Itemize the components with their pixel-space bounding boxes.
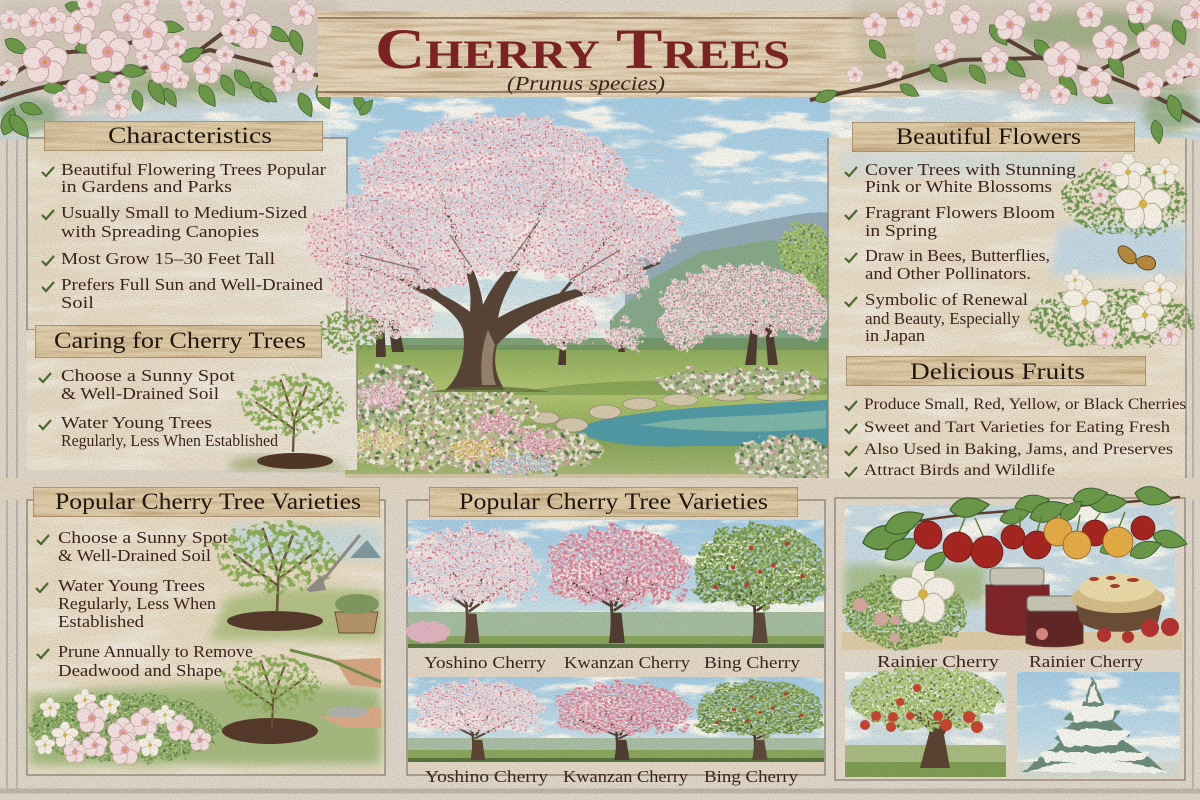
subtitle: (Prunus species) (507, 73, 665, 95)
labels: varieties row 1 (424, 653, 801, 672)
foliage bush (843, 561, 985, 648)
sky (330, 92, 830, 362)
text: caring list: Water Young Trees (61, 413, 212, 432)
scene row 2 (408, 677, 825, 762)
text: flowers list: in Japan (865, 326, 926, 345)
icon: butterfly (1118, 246, 1156, 270)
panel: characteristics background (27, 138, 347, 330)
scene row 1 (404, 520, 827, 648)
heading: varieties left: Popular Cherry Tree Varieties (55, 489, 361, 514)
snowy tree picture (1017, 672, 1180, 777)
heading: caring (35, 325, 322, 358)
right panel flowers (1028, 153, 1192, 348)
heading: varieties middle (429, 487, 798, 517)
text: flowers list: Symbolic of Renewal (865, 290, 1028, 309)
text: fruits list: Produce Small, Red, Yellow, or Black Cherries (864, 396, 1186, 413)
heading: characteristics (44, 121, 323, 151)
text: flowers list (845, 160, 1077, 345)
pie (1071, 574, 1165, 632)
text: flowers list: and Beauty, Especially (865, 309, 1020, 328)
text: planting list: & Well-Drained Soil (58, 546, 211, 565)
text: characteristics list: with Spreading Canopies (61, 222, 259, 241)
text: characteristics list: in Gardens and Parks (61, 177, 232, 196)
big cherry tree (305, 116, 680, 392)
heading: characteristics: Characteristics (108, 123, 272, 148)
pond stones (531, 393, 805, 432)
shelf (842, 632, 1182, 650)
text: caring list: & Well-Drained Soil (61, 384, 219, 403)
text: fruits list (845, 396, 1186, 479)
top right blossom branch (810, 0, 1200, 145)
text: planting list: Water Young Trees (58, 576, 205, 595)
heading: delicious fruits (846, 356, 1146, 386)
labels: rainier cherries: Rainier Cherry (877, 652, 1000, 671)
text: planting list (36, 528, 253, 680)
small cherries on shelf (1097, 618, 1179, 643)
heading: beautiful flowers: Beautiful Flowers (896, 124, 1081, 149)
labels: varieties row 1: Kwanzan Cherry (564, 653, 691, 672)
labels: varieties row 2 (425, 767, 799, 786)
text: flowers list: Cover Trees with Stunning (865, 160, 1077, 179)
title: Cherry Trees (375, 18, 790, 81)
text: fruits list: Also Used in Baking, Jams, and Preserves (864, 441, 1173, 458)
text: characteristics list (42, 160, 326, 312)
text: planting list: Established (58, 612, 145, 631)
garden scene (29, 650, 381, 765)
heading: delicious fruits: Delicious Fruits (910, 359, 1085, 384)
landscape scene (330, 92, 837, 481)
planting scene (210, 522, 381, 640)
foliage near caring banner (322, 310, 382, 354)
text: characteristics list: Prefers Full Sun and Well-Drained (61, 275, 324, 294)
labels: varieties row 2: Kwanzan Cherry (563, 767, 689, 786)
text: caring list: Regularly, Less When Established (61, 431, 279, 450)
cherry branch (860, 484, 1189, 575)
text: characteristics list: Beautiful Flowering Trees Popular (61, 160, 326, 179)
labels: varieties row 2: Yoshino Cherry (425, 767, 549, 786)
text: planting list: Regularly, Less When (58, 594, 216, 613)
text: fruits list: Sweet and Tart Varieties for Eating Fresh (864, 419, 1170, 436)
heading: varieties middle: Popular Cherry Tree Varieties (459, 489, 768, 514)
text: planting list: Deadwood and Shape (58, 661, 222, 680)
text: characteristics list: Usually Small to Medium-Sized (61, 203, 308, 222)
flower beds (333, 364, 837, 480)
text: fruits list: Attract Birds and Wildlife (864, 462, 1055, 479)
heading: caring: Caring for Cherry Trees (54, 328, 306, 353)
panel: bottom left (27, 500, 385, 775)
mountains (625, 212, 830, 340)
labels: varieties row 1: Yoshino Cherry (424, 653, 547, 672)
text: characteristics list: Soil (61, 293, 94, 312)
small tree with mulch (240, 374, 346, 469)
labels: rainier cherries (877, 652, 1144, 671)
text: planting list: Prune Annually to Remove (58, 642, 253, 661)
text: flowers list: and Other Pollinators. (865, 264, 1031, 283)
flower bed accents (343, 383, 566, 474)
text: caring list (39, 366, 279, 450)
text: flowers list: in Spring (865, 221, 938, 240)
text: flowers list: Fragrant Flowers Bloom (865, 203, 1055, 222)
text: flowers list: Pink or White Blossoms (865, 177, 1052, 196)
labels: varieties row 2: Bing Cherry (704, 767, 799, 786)
panel: varieties middle (404, 500, 827, 775)
text: flowers list: Draw in Bees, Butterflies, (865, 246, 1050, 265)
text: planting list: Choose a Sunny Spot (58, 528, 228, 547)
upper sky strip (0, 90, 1200, 140)
panel: fruits picture (835, 484, 1189, 780)
pond (572, 400, 828, 446)
heading: beautiful flowers (852, 122, 1135, 152)
heading: varieties left (33, 487, 380, 517)
apple tree picture (845, 666, 1006, 777)
band between panels (0, 478, 1200, 500)
background trees (335, 222, 834, 365)
top left blossom branch (0, 0, 376, 141)
lawn (345, 345, 830, 480)
panel: flowers and fruits background (828, 138, 1188, 480)
panel: caring background (27, 330, 357, 470)
text: characteristics list: Most Grow 15–30 Feet Tall (61, 249, 275, 268)
labels: varieties row 1: Bing Cherry (704, 653, 801, 672)
bottom path (345, 474, 830, 481)
text: caring list: Choose a Sunny Spot (61, 366, 236, 385)
labels: rainier cherries: Rainier Cherry (1029, 652, 1144, 671)
title banner (318, 11, 915, 97)
jars (986, 568, 1083, 647)
